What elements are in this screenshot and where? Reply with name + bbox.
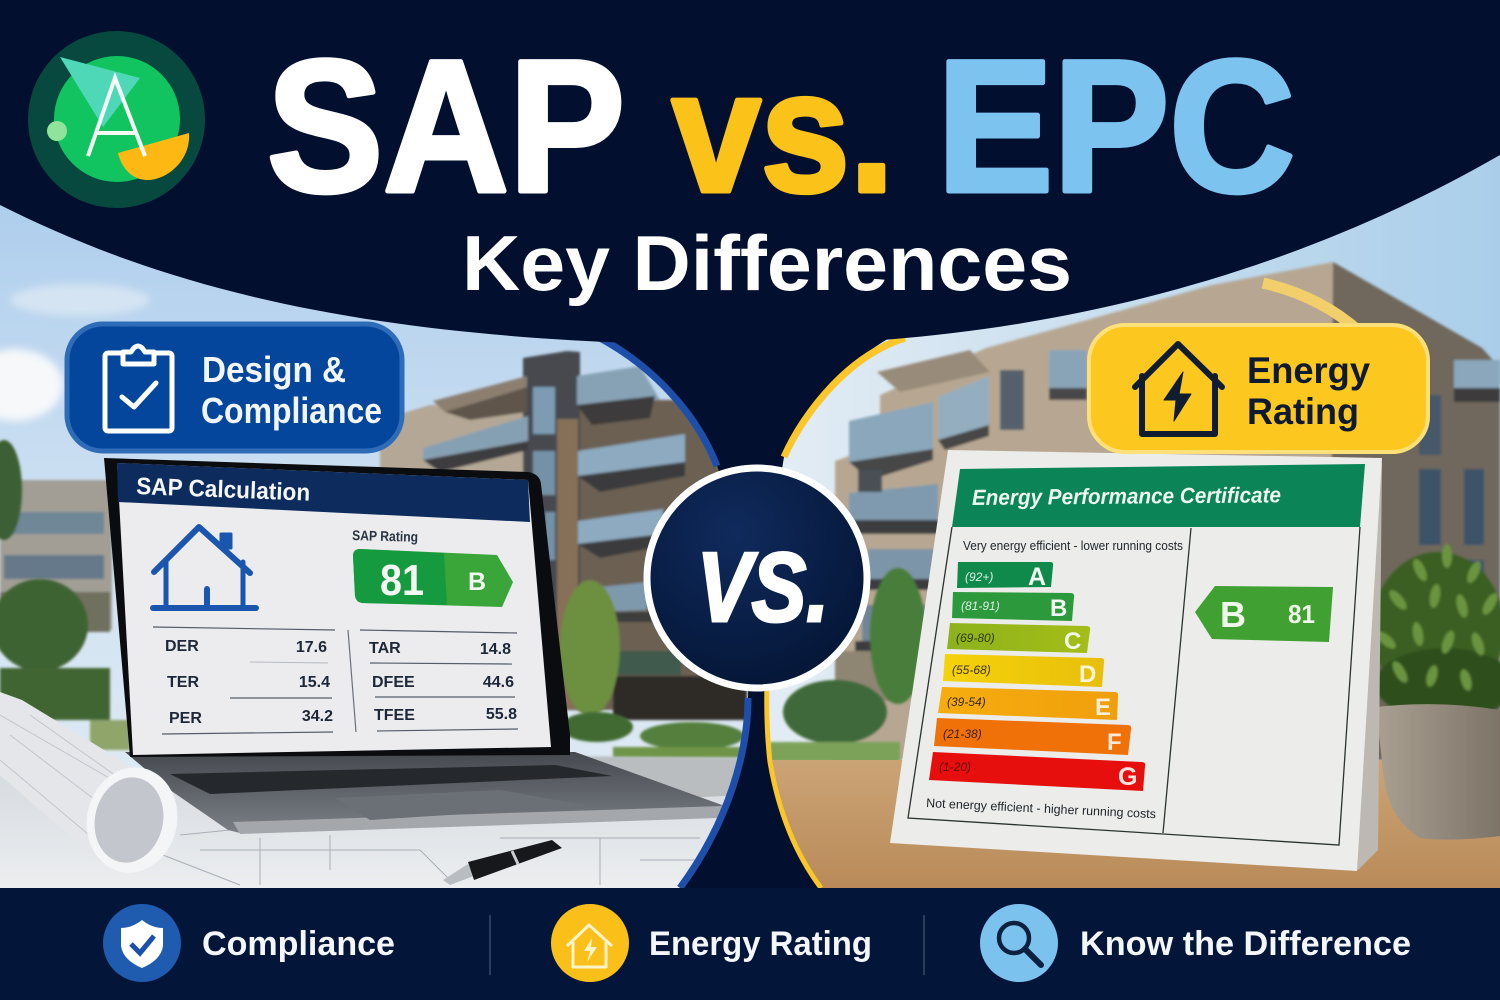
header banner xyxy=(0,0,1500,345)
balcony lower xyxy=(862,605,932,641)
pill: design and compliance xyxy=(67,324,402,451)
bar F xyxy=(934,718,1131,756)
balcony middle xyxy=(849,484,938,520)
panel: right photo scene xyxy=(760,100,1500,890)
blue arc left xyxy=(600,338,748,888)
trees and bushes right xyxy=(770,568,926,762)
sap rating label: SAP Rating xyxy=(352,527,418,545)
clouds left xyxy=(0,284,150,421)
wooden table xyxy=(770,760,1500,890)
label: Compliance xyxy=(202,925,395,963)
bar E: E xyxy=(1095,694,1111,721)
balcony 2 xyxy=(578,434,685,476)
footer item: know the difference xyxy=(980,904,1411,982)
bar B: B xyxy=(1050,595,1067,622)
title word EPC: EPC xyxy=(937,21,1295,231)
table left: TER xyxy=(167,674,199,691)
certificate stand back xyxy=(1340,460,1382,870)
panel: left photo scene xyxy=(0,150,760,890)
icon: shield xyxy=(121,920,163,968)
bar A: (92+) xyxy=(965,570,993,584)
bar A: A xyxy=(1028,563,1046,591)
label: Know the Difference xyxy=(1080,925,1411,963)
icon: magnifier xyxy=(999,923,1041,965)
rating number: 81 xyxy=(380,556,424,605)
footer item: compliance xyxy=(103,904,395,982)
certificate card xyxy=(890,450,1382,871)
balcony 4 xyxy=(600,582,647,612)
trees left xyxy=(0,440,130,750)
apartment building right xyxy=(835,262,1500,760)
screen display xyxy=(117,463,551,755)
screen header xyxy=(117,463,530,522)
title word vs.: vs. xyxy=(672,36,894,228)
blueprint roll xyxy=(0,692,187,881)
title word SAP: SAP xyxy=(267,21,625,231)
rating letter: B xyxy=(468,568,486,596)
plant pot xyxy=(1376,704,1500,840)
bar G: G xyxy=(1118,763,1137,791)
yellow arc lower right xyxy=(767,680,821,888)
pill text: Energy xyxy=(1247,350,1370,391)
laptop xyxy=(104,458,722,834)
apartment building left xyxy=(380,351,747,720)
sky right xyxy=(760,100,1500,890)
top roof slab xyxy=(433,376,527,412)
bar E: (39-54) xyxy=(947,695,986,709)
balcony 1 left xyxy=(423,416,528,460)
background building far left xyxy=(0,480,112,632)
icon: clipboard xyxy=(105,346,172,431)
bar G: (1-20) xyxy=(939,760,971,774)
rating arrow: 81 xyxy=(1288,599,1315,629)
blueprint desk xyxy=(0,775,726,886)
panel: energy performance certificate xyxy=(890,450,1382,871)
table left xyxy=(153,627,335,734)
bar C: C xyxy=(1064,628,1081,655)
upper roof slab xyxy=(877,350,990,392)
brick column xyxy=(557,419,578,709)
icon: house bolt xyxy=(567,925,612,967)
pill: energy rating xyxy=(1089,325,1428,452)
footer band xyxy=(0,888,1500,1000)
bar D: D xyxy=(1079,661,1096,688)
tree centre left xyxy=(560,580,620,716)
pill text line 2: Compliance xyxy=(201,390,382,431)
pill text: Design & xyxy=(202,349,346,390)
table left: DER xyxy=(165,638,199,655)
pavement xyxy=(584,755,738,798)
bar F: F xyxy=(1107,729,1122,756)
ground floor xyxy=(613,676,747,720)
certificate border xyxy=(908,527,1360,845)
main wall xyxy=(578,398,718,712)
bar B: (81-91) xyxy=(961,599,1000,613)
dark upper wall xyxy=(523,351,580,710)
sap rating badge xyxy=(353,549,513,607)
logo xyxy=(28,31,205,208)
laptop screen bezel xyxy=(104,458,570,757)
right wing xyxy=(1330,262,1500,760)
balcony 5 xyxy=(613,651,681,675)
vs badge xyxy=(647,468,867,688)
bar B xyxy=(952,592,1074,622)
rating arrow xyxy=(1195,586,1333,642)
windows xyxy=(533,387,555,434)
certificate title: Energy Performance Certificate xyxy=(972,482,1281,510)
right windows xyxy=(1419,469,1441,545)
bar C: (69-80) xyxy=(956,631,995,645)
bushes left xyxy=(561,712,748,758)
balcony top xyxy=(849,402,933,462)
laptop front edge xyxy=(233,806,722,834)
bar G xyxy=(929,752,1145,791)
icon: house with bolt xyxy=(1135,344,1222,434)
pen xyxy=(443,840,562,885)
table right: TAR xyxy=(369,640,401,657)
table right: 55.8 xyxy=(486,706,517,723)
table right xyxy=(348,630,518,732)
sky left xyxy=(0,205,748,769)
table right: TFEE xyxy=(374,707,415,724)
bar C xyxy=(947,623,1090,655)
table left: 34.2 xyxy=(302,708,333,725)
table right: DFEE xyxy=(372,674,415,691)
bar F: (21-38) xyxy=(943,727,982,741)
icon: house xyxy=(153,527,256,608)
table left: 17.6 xyxy=(296,639,327,656)
title: SAP vs. EPC xyxy=(267,21,1295,231)
table left: PER xyxy=(169,710,202,727)
yellow arc behind right pill xyxy=(1263,283,1360,332)
screen title: SAP Calculation xyxy=(136,473,311,507)
bar A xyxy=(957,562,1053,591)
balcony 3 xyxy=(578,509,663,544)
bar D xyxy=(943,654,1104,688)
certificate header xyxy=(952,464,1365,527)
yellow arc right xyxy=(784,338,905,457)
pill text line 2: Rating xyxy=(1247,391,1359,432)
efficient caption: Very energy efficient - lower running costs xyxy=(963,539,1183,553)
footer item: energy rating xyxy=(551,904,872,982)
upper right balcony xyxy=(577,366,660,405)
keyboard xyxy=(170,765,612,794)
label: Energy Rating xyxy=(649,925,872,963)
bar D: (55-68) xyxy=(952,663,991,677)
plant xyxy=(1372,544,1500,720)
subtitle: Key Differences xyxy=(462,219,1072,307)
laptop base xyxy=(125,752,722,833)
table right: 14.8 xyxy=(480,641,511,658)
tan wing xyxy=(378,404,524,472)
icon: check xyxy=(131,936,154,953)
tan wing xyxy=(835,262,1335,760)
vs text: VS. xyxy=(697,532,829,642)
table right: 44.6 xyxy=(483,674,514,691)
table left: 15.4 xyxy=(299,674,330,691)
inefficient caption: Not energy efficient - higher running costs xyxy=(926,796,1156,821)
bar E xyxy=(938,687,1118,721)
rating arrow: B xyxy=(1220,594,1246,635)
trackpad xyxy=(366,790,534,820)
